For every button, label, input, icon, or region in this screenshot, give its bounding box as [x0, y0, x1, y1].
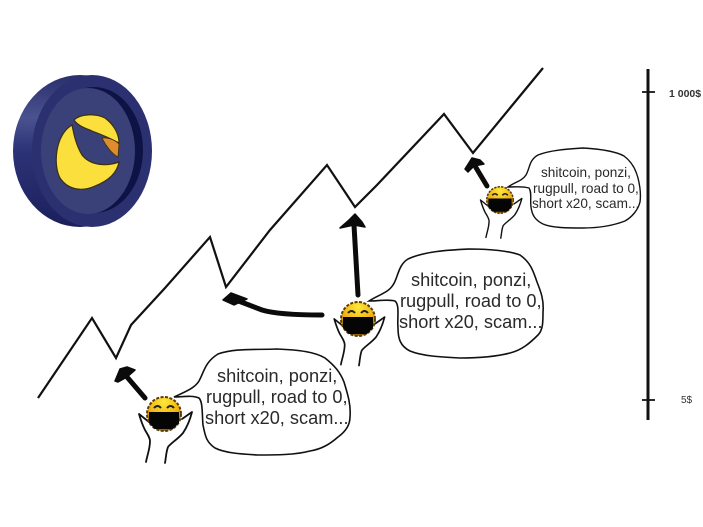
arrow: toward third dip — [340, 214, 365, 295]
speech bubble top: short x20, scam... — [532, 196, 639, 211]
arrow: toward fourth dip — [465, 158, 487, 186]
speech bubble top: shitcoin, ponzi, — [541, 165, 631, 180]
speech bubble middle: short x20, scam... — [399, 312, 543, 332]
arrow: bottom dip — [115, 367, 145, 398]
icon: Terra Luna coin — [13, 75, 152, 227]
speech bubble middle: shitcoin, ponzi, — [411, 270, 531, 290]
speech bubble bottom: short x20, scam... — [205, 408, 349, 428]
speech bubble middle: rugpull, road to 0, — [400, 291, 542, 311]
arrow: toward second dip — [223, 293, 322, 315]
label: 5$: 5$ — [681, 395, 693, 406]
speech bubble bottom: rugpull, road to 0, — [206, 387, 348, 407]
price line — [38, 68, 543, 398]
character: laughing smiley middle — [334, 302, 385, 366]
speech bubble top: rugpull, road to 0, — [533, 181, 639, 196]
character: laughing smiley top — [480, 187, 522, 238]
character: laughing smiley bottom — [139, 397, 192, 463]
speech bubble bottom: shitcoin, ponzi, — [217, 366, 337, 386]
label: 1 000$: 1 000$ — [669, 88, 701, 100]
speech bubble middle — [369, 249, 543, 358]
speech bubble top — [508, 148, 640, 228]
speech bubble bottom — [174, 349, 350, 455]
price axis — [642, 69, 701, 420]
